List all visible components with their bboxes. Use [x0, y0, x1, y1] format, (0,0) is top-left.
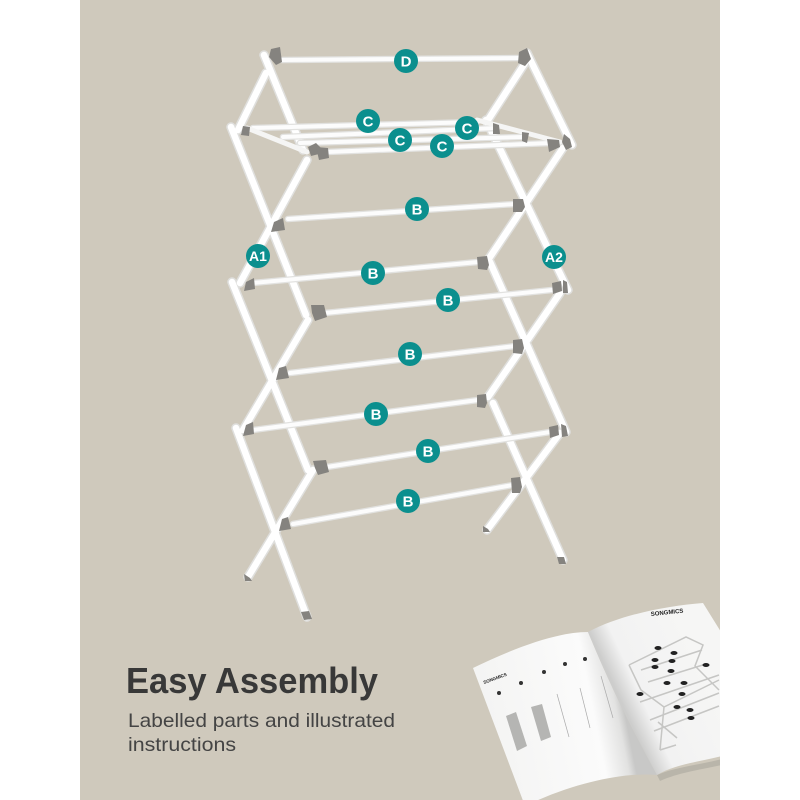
- grey connectors: [241, 47, 572, 620]
- booklet right page: [588, 603, 726, 775]
- badge B 7: [396, 489, 420, 513]
- booklet left page: [473, 632, 657, 800]
- part label badges: [246, 49, 566, 513]
- badge B 2: [361, 261, 385, 285]
- badge C 1: [356, 109, 380, 133]
- badge B 6: B: [423, 444, 434, 460]
- right page rack diagram: SONGMICS: [651, 609, 684, 618]
- badge D: [394, 49, 418, 73]
- badge A1: A1: [249, 248, 267, 264]
- right page rack diagram: [629, 609, 719, 750]
- rack frame tubes: [231, 53, 572, 617]
- drying rack illustration: [231, 47, 572, 620]
- badge B 5: [364, 402, 388, 426]
- badge B 1: [405, 197, 429, 221]
- badge C 2: C: [395, 132, 406, 150]
- background panel: [80, 0, 720, 800]
- badge B 2: B: [368, 266, 379, 282]
- right white margin: [720, 0, 800, 800]
- badge C 4: C: [462, 120, 473, 138]
- badge B 4: [398, 342, 422, 366]
- left page content: [483, 657, 613, 751]
- badge C 4: [455, 116, 479, 140]
- rack rods: [247, 58, 560, 524]
- booklet page stack edge: [657, 760, 720, 781]
- badge B 1: B: [412, 202, 423, 218]
- description text: instructions: [128, 734, 236, 756]
- badge A2: A2: [545, 249, 563, 265]
- badge C 3: C: [437, 138, 448, 156]
- instruction booklet: [473, 603, 726, 800]
- badge D: D: [401, 54, 412, 70]
- badge B 5: B: [371, 406, 382, 424]
- heading: Easy Assembly: [126, 660, 378, 701]
- badge B 6: [416, 439, 440, 463]
- badge C 1: C: [363, 114, 374, 130]
- badge B 3: B: [443, 292, 454, 310]
- badge A2: [542, 245, 566, 269]
- left page content: SONGMICS: [483, 672, 507, 685]
- badge A1: [246, 244, 270, 268]
- badge C 2: [388, 128, 412, 152]
- badge B 3: [436, 288, 460, 312]
- badge B 7: B: [403, 494, 414, 510]
- badge C 3: [430, 134, 454, 158]
- description text: Labelled parts and illustrated: [128, 710, 395, 732]
- badge B 4: B: [405, 346, 416, 364]
